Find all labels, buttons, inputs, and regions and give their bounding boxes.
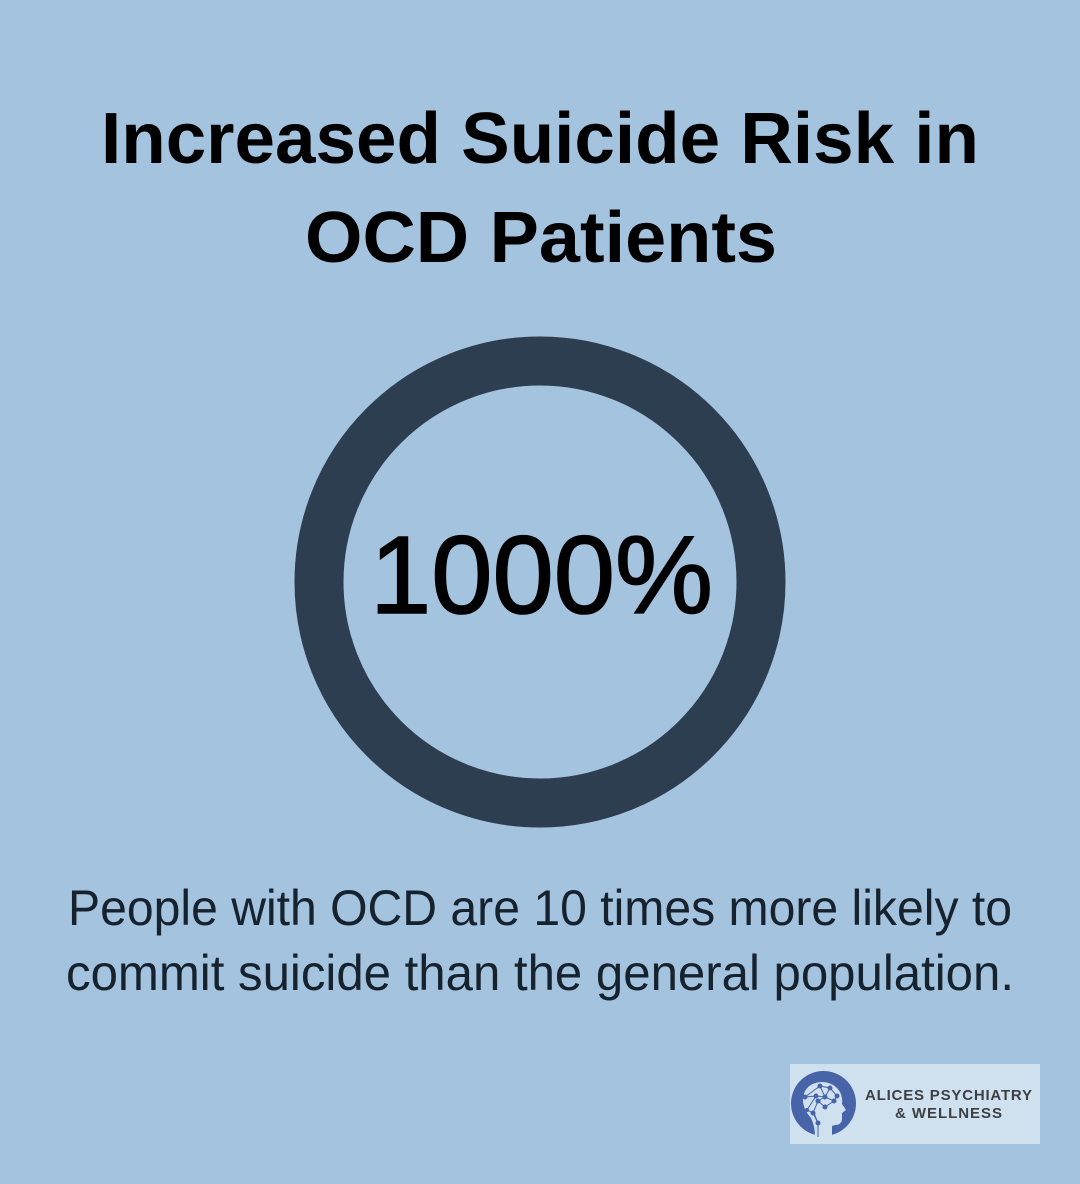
title <box>101 99 979 278</box>
title: OCD Patients <box>305 198 777 278</box>
icon: head with brain network <box>791 1071 856 1137</box>
logo wordmark: ALICES PSYCHIATRY <box>865 1087 1032 1104</box>
description text: People with OCD are 10 times more likely to <box>68 880 1012 936</box>
title: Increased Suicide Risk in <box>101 99 979 179</box>
ring chart <box>319 361 761 803</box>
logo: Alices Psychiatry & Wellness <box>790 1064 1040 1144</box>
description text: commit suicide than the general population. <box>66 945 1014 1001</box>
statistic: 1000%: 1000% <box>370 514 713 637</box>
logo wordmark <box>865 1087 1032 1122</box>
description text <box>66 880 1014 1001</box>
logo wordmark: & WELLNESS <box>895 1105 1002 1122</box>
